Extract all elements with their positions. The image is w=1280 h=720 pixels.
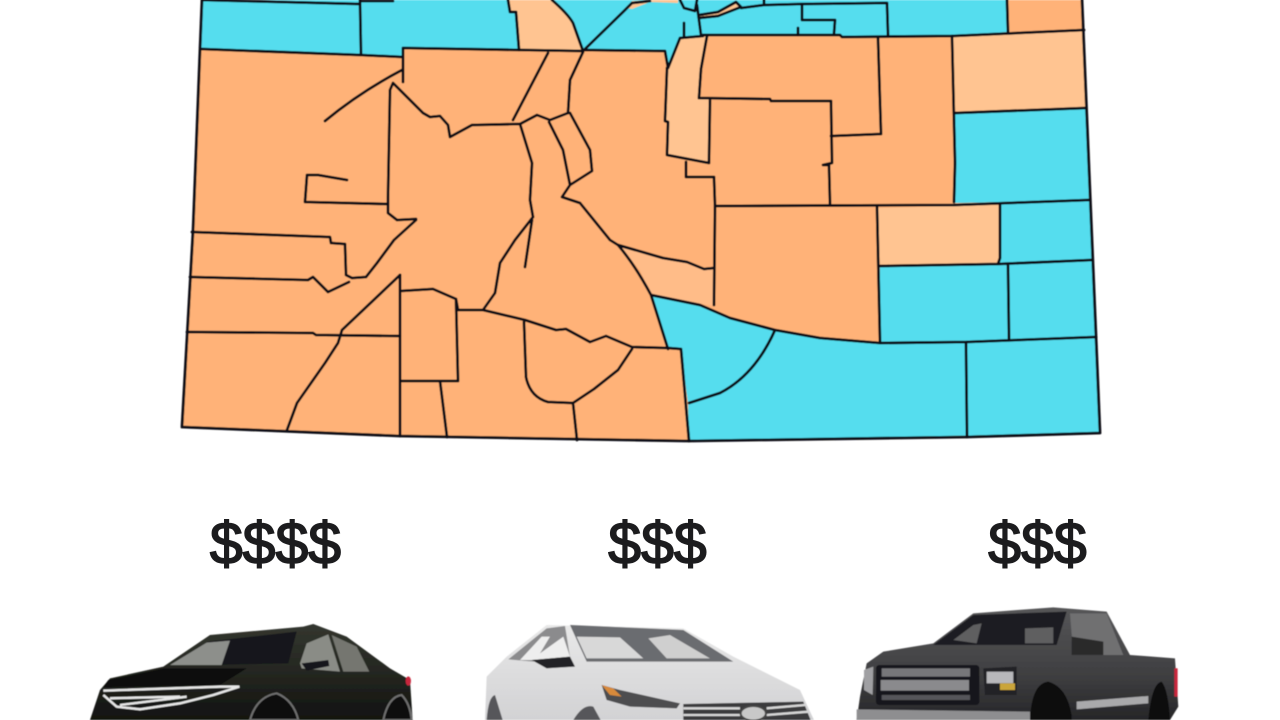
truck mirror bbox=[1072, 637, 1103, 655]
white sedan side windows bbox=[508, 626, 575, 668]
truck wheel arches bbox=[1030, 682, 1170, 720]
east-central light county bbox=[878, 205, 1000, 266]
northeast light county bbox=[952, 30, 1086, 113]
county map of Colorado bbox=[182, 0, 1100, 441]
truck side window bbox=[1070, 613, 1123, 655]
northern light counties bbox=[509, 0, 582, 50]
sedan windshield bbox=[170, 632, 297, 665]
south-central lighter county bbox=[618, 245, 714, 306]
map base: orange counties bbox=[182, 0, 1100, 441]
truck windshield bbox=[933, 612, 1067, 645]
vehicle: grey pickup truck bbox=[857, 607, 1178, 720]
truck headlights bbox=[864, 667, 1017, 695]
price label: three dollar signs, right: $$$ bbox=[988, 510, 1087, 576]
truck side trim bbox=[1077, 696, 1148, 709]
light county east of Denver bbox=[665, 36, 710, 163]
vehicle: white sedan bbox=[485, 625, 814, 720]
sedan headlight and grille bbox=[103, 687, 239, 709]
white sedan grille bbox=[683, 702, 811, 720]
price label: four dollar signs: $$$$ bbox=[210, 510, 341, 576]
white sedan headlight bbox=[602, 685, 680, 708]
white sedan windshield bbox=[570, 625, 733, 662]
white sedan wheel arches bbox=[487, 695, 601, 720]
sedan body bbox=[90, 624, 413, 720]
sedan side windows bbox=[300, 634, 369, 672]
sedan taillight bbox=[406, 676, 411, 686]
white sedan body bbox=[485, 625, 814, 720]
sedan wheel arches bbox=[250, 693, 412, 720]
county boundary lines bbox=[182, 0, 1100, 441]
small light strip counties bbox=[626, 0, 741, 18]
truck taillight bbox=[1174, 668, 1178, 697]
southeastern blue counties bbox=[651, 200, 1100, 441]
eastern blue county bbox=[954, 108, 1089, 203]
sedan hood bbox=[103, 668, 247, 687]
truck body bbox=[857, 607, 1178, 720]
truck grille bbox=[876, 665, 979, 705]
truck bumper bbox=[857, 709, 1030, 720]
north-central blue counties bbox=[552, 0, 1008, 68]
price label: three dollar signs, center: $$$ bbox=[608, 510, 707, 576]
northwest blue counties bbox=[201, 0, 519, 57]
vehicle: dark sedan bbox=[90, 624, 413, 720]
northeast corner county bbox=[1007, 0, 1083, 32]
